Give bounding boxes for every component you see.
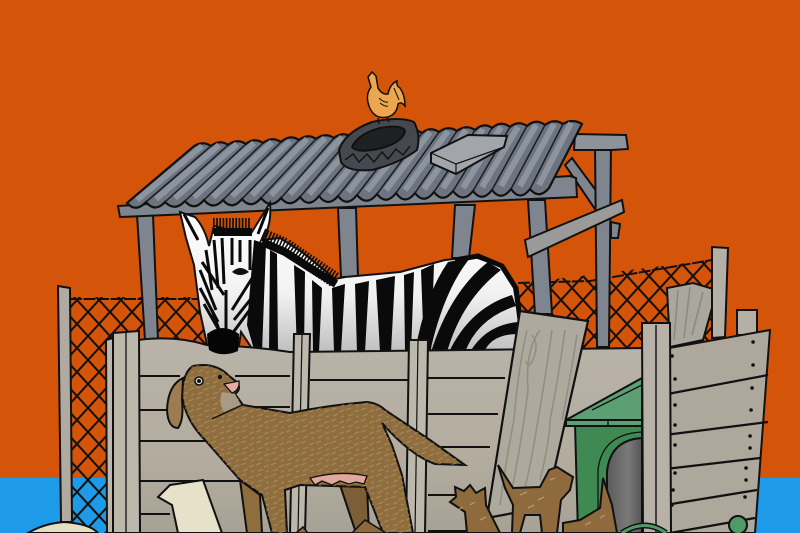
small dog: left puppy xyxy=(450,485,500,533)
small paws in front of big dog xyxy=(296,520,386,533)
loose plank on roof xyxy=(431,135,507,174)
tire on roof xyxy=(339,119,418,170)
zebra: mane comb xyxy=(213,226,335,280)
small dog: right puppy xyxy=(563,478,617,533)
small dog: centre puppy xyxy=(498,465,573,533)
big brown dog xyxy=(167,365,465,533)
right panel: nails xyxy=(672,342,753,505)
rooster xyxy=(367,72,405,124)
fence: board lines xyxy=(140,376,505,531)
right panel: board lines xyxy=(653,375,768,533)
dog: muzzle patch xyxy=(220,392,241,412)
green watering can head xyxy=(729,516,747,533)
zebra: muzzle xyxy=(207,328,239,354)
tall right post xyxy=(712,247,728,338)
zebra: crest xyxy=(214,232,336,284)
zebra: body stripes xyxy=(247,240,434,353)
shed: posts and beams xyxy=(118,134,628,347)
leaning plank xyxy=(487,311,588,518)
plank: wood grain xyxy=(500,330,577,505)
dog: neck line xyxy=(212,405,242,419)
right fence post xyxy=(642,323,671,533)
dog: nose xyxy=(224,381,239,393)
zebra: inner ears xyxy=(184,208,268,240)
zebra: rump outline xyxy=(455,256,520,350)
chain-link top wire xyxy=(70,260,712,299)
towel on fence xyxy=(158,480,222,533)
rock bottom left xyxy=(28,522,98,533)
zebra: face stripes xyxy=(200,238,258,338)
dog: eye xyxy=(195,377,203,385)
green hose: fill colour xyxy=(622,526,666,533)
dog: far legs xyxy=(240,480,262,533)
chain-link fence: left xyxy=(70,297,210,533)
chain-link fence: right xyxy=(515,260,712,350)
zebra: body silhouette xyxy=(180,203,519,354)
green hose xyxy=(622,526,666,533)
background: blue ground band xyxy=(0,478,800,533)
dog: body xyxy=(182,365,465,533)
zebra xyxy=(180,203,520,354)
dog house: door xyxy=(607,438,642,533)
dog: ear xyxy=(167,378,183,428)
re-drawn zebra muzzle over the fence edge xyxy=(207,334,239,354)
right fence panel xyxy=(653,330,770,533)
dog house: door frame xyxy=(598,432,642,533)
zebra: eye xyxy=(232,268,249,275)
roof: dark grooves xyxy=(146,124,563,202)
dog: fur texture xyxy=(182,365,465,533)
zebra: rump stripes xyxy=(415,258,518,352)
green dog house xyxy=(566,378,642,533)
short right post xyxy=(737,310,757,335)
plank behind right panel xyxy=(667,283,717,347)
wooden fence panel xyxy=(138,338,645,533)
left chain-link post xyxy=(58,286,72,522)
shed: corrugated roof xyxy=(127,121,582,208)
roof: light ridges xyxy=(137,123,571,200)
dog: udder xyxy=(310,473,367,485)
fence: posts xyxy=(106,331,428,533)
